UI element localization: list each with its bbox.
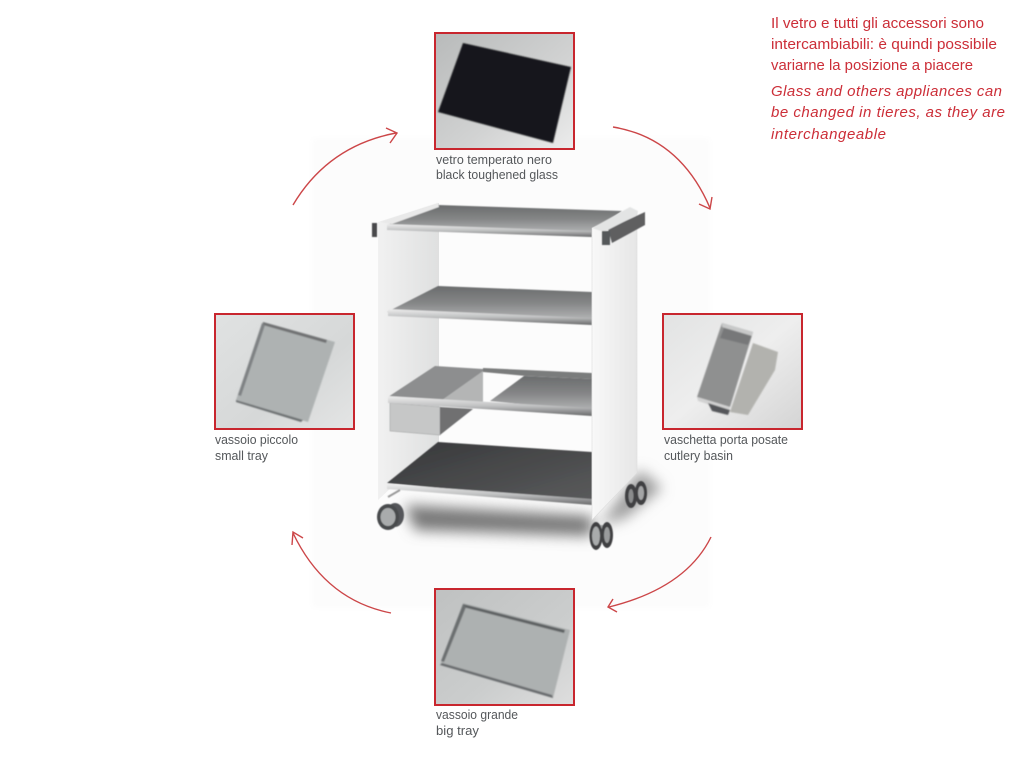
panel: big tray [435, 589, 574, 738]
caption: cutlery basin [664, 448, 733, 463]
big tray photo [440, 603, 570, 698]
panel: small tray [215, 314, 354, 463]
bottom glass shelf [387, 442, 592, 505]
caption: small tray [215, 448, 268, 463]
callout: Italian note: variarne la posizione a piacere [771, 57, 973, 74]
second shelf [387, 286, 592, 325]
callout: Italian note: Il vetro e tutti gli accessori sono [771, 15, 984, 32]
callout: Italian note [771, 15, 997, 74]
handle [372, 207, 645, 245]
arrow: right to bottom [608, 537, 711, 612]
panel: cutlery basin [663, 314, 802, 463]
right side panel [592, 212, 637, 520]
trolley product photo [372, 203, 662, 550]
caption: vetro temperato nero [436, 152, 552, 167]
top shelf [380, 203, 622, 237]
arrow: left to top [293, 128, 397, 205]
glass photo [438, 43, 571, 143]
caster wheels [377, 481, 647, 550]
callout: English note: interchangeable [771, 126, 886, 143]
left side panel [378, 203, 439, 500]
floor shadow [405, 505, 592, 536]
caption: vaschetta porta posate [664, 432, 788, 447]
small tray photo [236, 322, 335, 422]
caption: big tray [436, 723, 479, 738]
third shelf with basin and tray [388, 366, 592, 435]
panel: black toughened glass [435, 32, 574, 182]
arrow: top to right [613, 127, 712, 209]
caption: vassoio grande [436, 707, 518, 722]
callout: English note [771, 83, 1005, 143]
caption: black toughened glass [436, 167, 558, 182]
photo backdrop [312, 138, 710, 608]
basin photo [697, 323, 778, 415]
arrow: bottom to left [292, 532, 391, 613]
caption: vassoio piccolo [215, 432, 298, 447]
callout: English note: be changed in tieres, as they are [771, 104, 1005, 121]
callout: English note: Glass and others appliances can [771, 83, 1002, 100]
callout: Italian note: intercambiabili: è quindi possibile [771, 36, 997, 53]
